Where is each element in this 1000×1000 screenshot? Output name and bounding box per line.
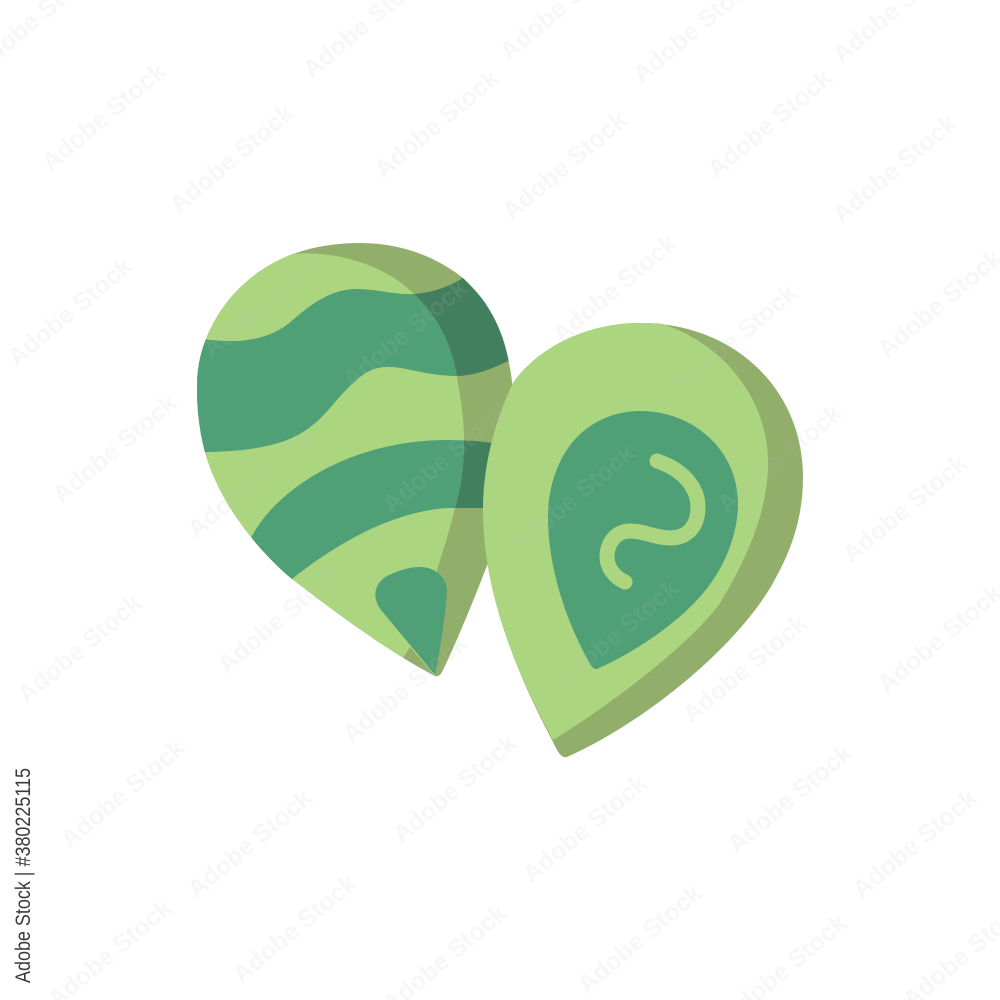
stock watermark pattern: Adobe Stock <box>517 769 652 889</box>
back leaf shadow side <box>197 243 513 676</box>
icon: back leaf with stripes <box>197 243 512 676</box>
lower curved stripe <box>251 440 464 579</box>
stock watermark pattern: Adobe Stock <box>847 784 982 904</box>
stock watermark pattern: Adobe Stock <box>837 449 972 569</box>
inner seed shape <box>548 411 738 669</box>
upper wavy stripe <box>197 289 457 452</box>
stock watermark pattern: Adobe Stock <box>572 879 707 999</box>
stock watermark pattern: Adobe Stock <box>702 64 837 184</box>
stock watermark pattern: Adobe Stock <box>547 229 682 349</box>
stock watermark pattern: Adobe Stock <box>377 399 512 519</box>
stock watermark pattern: Adobe Stock <box>667 279 802 399</box>
stock watermark pattern: Adobe Stock <box>722 739 857 859</box>
stock watermark pattern: Adobe Stock <box>712 399 847 519</box>
squiggle vein <box>607 461 698 582</box>
stock watermark pattern: Adobe Stock <box>337 629 472 749</box>
icon: front leaf <box>483 323 803 757</box>
stock watermark pattern: Adobe Stock <box>677 609 812 729</box>
infographic canvas <box>14 243 803 983</box>
stock watermark pattern: Adobe Stock <box>55 734 190 854</box>
stock watermark pattern: Adobe Stock <box>497 106 632 226</box>
stock watermark pattern: Adobe Stock <box>827 109 962 229</box>
stock watermark pattern: Adobe Stock <box>505 439 640 559</box>
stock watermark pattern: Adobe Stock <box>337 274 472 394</box>
stock watermark pattern: Adobe Stock <box>2 252 137 372</box>
front leaf lit face <box>483 323 768 740</box>
stock watermark pattern: Adobe Stock <box>197 244 332 364</box>
back leaf shaded stripes <box>197 278 509 579</box>
stock watermark pattern: Adobe Stock <box>387 729 522 849</box>
back leaf lit face <box>197 253 464 676</box>
stock id caption: Adobe Stock | #380225115 <box>12 768 35 983</box>
front leaf shadow side <box>483 323 803 757</box>
stock watermark pattern: Adobe Stock <box>369 64 504 184</box>
stock watermark pattern: Adobe Stock <box>164 99 299 219</box>
stock watermark pattern: Adobe Stock <box>227 869 362 989</box>
stock watermark pattern: Adobe Stock <box>549 574 684 694</box>
stock watermark pattern: Adobe Stock <box>182 784 317 904</box>
stock watermark pattern: Adobe Stock <box>47 389 182 509</box>
small drop spot <box>375 567 447 675</box>
stock watermark pattern: Adobe Stock <box>182 424 317 544</box>
stock watermark pattern: Adobe Stock <box>212 559 347 679</box>
stock watermark pattern: Adobe Stock <box>36 57 171 177</box>
stock watermark pattern: Adobe Stock <box>12 589 147 709</box>
